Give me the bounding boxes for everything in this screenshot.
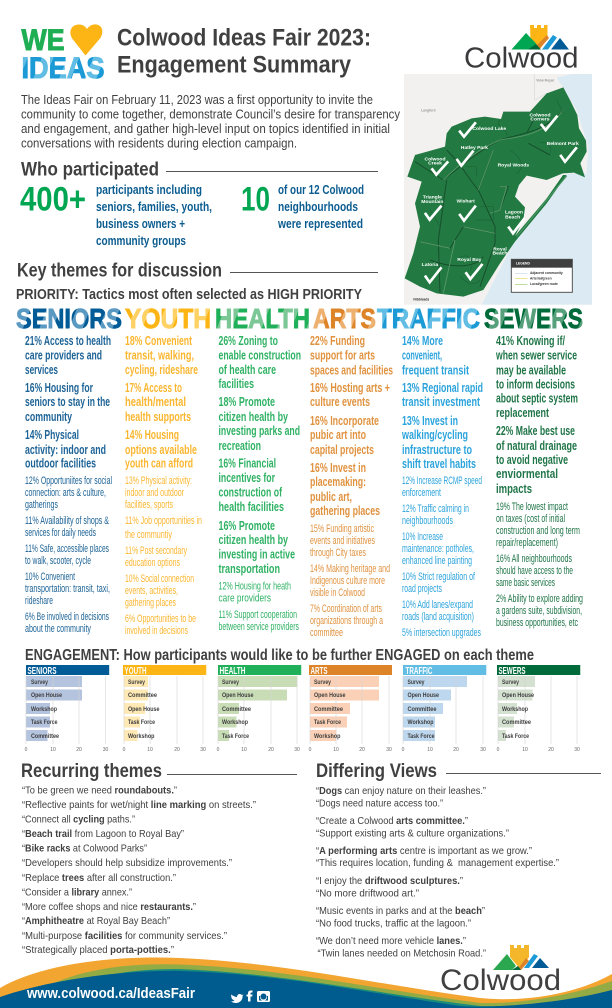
quotes: recurring themes: “More coffee shops and nice restaurants.” (22, 901, 196, 913)
quotes: differing views: “No more driftwood art.” (316, 888, 419, 900)
stat: 10 neighbourhoods (241, 180, 364, 231)
big theme words: HEALTH (215, 303, 310, 334)
heading: Key themes for discussion: Key themes for discussion (17, 260, 222, 282)
map labels: Hatley Park (461, 145, 488, 151)
map labels: Latoria (422, 262, 439, 268)
logo: We Love Ideas: WE (22, 24, 64, 57)
bar chart: traffic: Open House (408, 692, 439, 699)
map of Colwood neighbourhoods (404, 74, 592, 305)
heading: Differing Views: Differing Views (316, 760, 437, 782)
column: traffic: shift travel habits (402, 456, 476, 471)
quotes: differing views: “We don’t need more vehicle lanes.” (316, 935, 466, 947)
bar chart: arts: Task Force (314, 719, 341, 726)
column: arts: capital projects (310, 442, 374, 457)
column: youth: transit, walking, (125, 348, 194, 362)
bar chart: traffic (402, 665, 487, 753)
quotes: recurring themes: “Consider a library annex.” (22, 886, 132, 898)
column: sewers: same basic services (496, 577, 555, 589)
bar chart: traffic: 20 (453, 747, 459, 753)
column: seniors: to walk, scooter, cycle (25, 555, 91, 567)
stat: 400+ participants: seniors, families, youth, (96, 199, 212, 214)
column: sewers: may be available (496, 362, 566, 378)
column: arts: public art, (310, 489, 352, 504)
column: health: incentives for (218, 470, 275, 485)
quotes: recurring themes: “Bike racks at Colwood Parks” (22, 842, 147, 854)
column: traffic: road projects (402, 583, 442, 595)
bar chart: health: 10 (241, 747, 247, 753)
map labels: Mountain (421, 199, 443, 205)
logo: We Love Ideas: IDEAS (22, 52, 104, 85)
column: arts: gathering places (310, 503, 380, 518)
column: health: 11% Support cooperation (218, 609, 297, 621)
column: sewers: to avoid negative (496, 452, 568, 467)
column: health: citizen health by (218, 532, 289, 547)
column: youth: 17% Access to (125, 380, 182, 395)
column: traffic: 10% Strict regulation of (402, 571, 476, 583)
bar chart: traffic: 30 (480, 747, 486, 753)
map labels: Royal (493, 247, 507, 253)
quotes: recurring themes: “To be green we need roundabouts.” (22, 784, 177, 796)
column: health: 16% Financial (218, 456, 276, 470)
column: seniors: 6% Be involved in decisions (25, 611, 109, 623)
map labels: Beach (505, 215, 520, 221)
quotes: recurring themes (22, 784, 256, 956)
bar chart: sewers: Survey (502, 679, 519, 686)
bar chart: arts: Survey (314, 679, 331, 686)
column: sewers: 16% All neighbourhoods (496, 553, 572, 565)
column: traffic: transit investment (402, 394, 481, 409)
intro text: community to come together, demonstrate Council’s desire for transparency (21, 106, 400, 122)
column: seniors: 12% Opportuniites for social (25, 475, 112, 487)
stat: 10 neighbourhoods: neighbourhoods (278, 199, 358, 214)
bar chart: youth: Survey (128, 679, 145, 686)
column: seniors: connection: arts & culture, (25, 487, 106, 499)
column: arts: through City taxes (310, 547, 366, 559)
icons: social media (231, 990, 270, 1003)
column: seniors: community (25, 409, 73, 424)
neighbourhood area (405, 87, 587, 297)
column: youth: 11% Post secondary (125, 545, 187, 557)
quotes: recurring themes: “Amphitheatre at Royal Bay Beach” (22, 915, 170, 927)
column: youth: 13% Physical activity: (125, 475, 192, 487)
column: youth: 18% Convenient (125, 333, 192, 348)
map labels: Colwood (424, 157, 446, 163)
bar chart: traffic: 10 (427, 747, 433, 753)
column: youth: 11% Job opportunities in (125, 515, 202, 527)
column: health: facilities (218, 376, 254, 391)
column: health: 12% Housing for heath (218, 580, 291, 592)
bar chart: sewers: 20 (548, 747, 554, 753)
column: traffic: 12% Increase RCMP speed (402, 475, 482, 487)
bar chart: arts: 0 (309, 747, 312, 753)
heading: Recurring themes: Recurring themes (21, 760, 162, 782)
column: arts: committee (310, 627, 343, 639)
map labels: Corners (530, 117, 550, 123)
column: seniors: gatherings (25, 499, 58, 511)
column: arts: 7% Coordination of arts (310, 603, 382, 615)
column: arts: organizations through a (310, 615, 384, 627)
bar chart: seniors: SENIORS (28, 666, 57, 677)
quotes: differing views: “Twin lanes needed on Metchosin Road.” (318, 948, 486, 960)
column: traffic: roads (land acquisition) (402, 611, 474, 623)
bar chart: traffic: TRAFFIC (406, 666, 432, 677)
map labels: Belmont Park (547, 141, 579, 147)
column: traffic: enhanced line painting (402, 555, 472, 567)
stat: 10 neighbourhoods: of our 12 Colwood (278, 182, 364, 197)
map of Colwood neighbourhoods: Nibbleads (413, 298, 429, 302)
column: traffic: convenient, (402, 348, 442, 362)
bar chart: arts: Workshop (314, 733, 341, 740)
column: seniors: 16% Housing for (25, 380, 93, 395)
map checkmarks (426, 117, 576, 282)
column: sewers: to inform decisions (496, 376, 575, 392)
map labels (421, 113, 579, 268)
intro text: The Ideas Fair on February 11, 2023 was a first opportunity to invite the (21, 92, 373, 107)
column: arts: culture events (310, 394, 370, 409)
column: sewers: 19% The lowest impact (496, 501, 568, 513)
column: health: 26% Zoning to (218, 333, 278, 348)
logo: We Love Ideas (22, 24, 104, 85)
bar chart: sewers: Open House (502, 692, 534, 699)
bar chart: health: HEALTH (220, 666, 246, 677)
bar chart: seniors: Open House (31, 692, 62, 699)
logo: Colwood footer (440, 945, 561, 997)
map legend: Local/green route (530, 282, 558, 286)
column: seniors: about the community (25, 623, 91, 635)
bar chart: arts: Committee (314, 706, 343, 713)
column: health: 16% Promote (218, 518, 275, 533)
bar chart: sewers: Task Force (502, 733, 529, 740)
bar chart: arts: 20 (359, 747, 365, 753)
quotes: differing views (316, 785, 559, 960)
column: traffic: 13% Regional rapid (402, 380, 483, 395)
column: traffic: infrastructure to (402, 442, 472, 457)
quotes: recurring themes: “Developers should help subsidize improvements.” (22, 857, 232, 869)
bar chart: health: 30 (294, 747, 300, 753)
column: health: investing in active (218, 546, 295, 562)
bar chart: sewers: 0 (497, 747, 500, 753)
column: traffic: 10% Add lanes/expand (402, 599, 473, 611)
bar chart: sewers: 10 (522, 747, 528, 753)
bar chart: health: Open House (222, 692, 254, 699)
column: seniors: 11% Safe, accessible places (25, 543, 109, 555)
quotes: differing views: “I enjoy the driftwood sculptures.” (316, 875, 463, 887)
column: traffic: walking/cycling (401, 427, 468, 442)
title: Engagement Summary (117, 52, 352, 78)
column: arts: 16% Incorporate (310, 413, 379, 428)
column: seniors: 21% Access to health (25, 333, 111, 348)
bar chart: sewers: 30 (574, 747, 580, 753)
column: traffic: 10% Increase (402, 531, 443, 543)
bar chart: youth: 30 (200, 747, 206, 753)
column: seniors: 11% Availability of shops & (25, 515, 109, 527)
quotes: recurring themes: “Replace trees after all construction.” (22, 872, 176, 884)
column: health (218, 333, 301, 633)
intro text (21, 92, 400, 150)
bar chart: traffic: Committee (408, 706, 437, 713)
bar chart: seniors: Committee (31, 733, 59, 740)
column: arts: events and initiatives (310, 535, 375, 547)
bar chart: health: Survey (222, 679, 239, 686)
footer wave (0, 957, 612, 1008)
big theme words (16, 303, 583, 334)
bar chart: youth: 0 (123, 747, 126, 753)
map legend (511, 259, 572, 292)
quotes: differing views: “Create a Colwood arts committee.” (316, 815, 468, 827)
column: arts: spaces and facilities (310, 362, 393, 378)
column: youth: the communtiy (125, 529, 172, 541)
column: sewers: of natural drainage (496, 438, 577, 453)
column: health: investing parks and (218, 423, 300, 438)
column: seniors: 10% Convenient (25, 571, 75, 583)
column: youth: indoor and outdoor (125, 487, 184, 499)
map labels: Wishart (457, 199, 475, 205)
bar chart: sewers: SEWERS (498, 666, 526, 677)
bar chart: arts (309, 665, 392, 753)
column: arts: visible in Colwood (310, 587, 365, 599)
column: youth: cycling, rideshare (125, 362, 198, 377)
bar chart: arts: 30 (386, 747, 392, 753)
map labels: Beach (493, 251, 507, 257)
bar chart: youth: Committee (128, 692, 157, 699)
bar chart: health (217, 665, 302, 753)
bar chart: arts: Open House (314, 692, 346, 699)
column: youth: options available (125, 442, 197, 457)
column: traffic (401, 333, 483, 639)
column: traffic: 12% Traffic calming in (402, 503, 469, 515)
column: arts: support for arts (310, 348, 375, 362)
column: health: between service providers (218, 621, 299, 633)
column: sewers: 22% Make best use (496, 423, 575, 438)
bar chart: arts: ARTS (310, 666, 328, 677)
column: youth: education options (125, 557, 180, 569)
column: youth: gathering places (125, 597, 176, 609)
map of Colwood neighbourhoods: View Royal (536, 79, 554, 83)
bar chart: seniors: 20 (76, 747, 82, 753)
quotes: differing views: “Music events in parks and at the beach” (316, 905, 485, 917)
stat: 10 neighbourhoods: were represented (277, 216, 363, 231)
quotes: recurring themes: “Connect all cycling paths.” (22, 814, 135, 826)
column: youth: involved in decisions (125, 625, 188, 637)
map labels: Lagoon (505, 209, 523, 215)
column: sewers: repair/replacement) (496, 537, 558, 549)
big theme words: SENIORS (16, 303, 122, 334)
column: seniors: transportation: transit, taxi, (25, 583, 110, 595)
bar chart: seniors: 10 (50, 747, 56, 753)
quotes: recurring themes: “Strategically placed porta-potties.” (22, 944, 174, 956)
bar chart: seniors: 30 (103, 747, 108, 753)
title: Colwood Ideas Fair 2023: (117, 24, 371, 52)
column: health: citizen health by (218, 409, 289, 424)
big theme words: SEWERS (484, 303, 583, 334)
bar chart: seniors: 0 (25, 747, 28, 753)
footer URL: www.colwood.ca/IdeasFair (26, 985, 195, 1002)
column: youth: events, activities, (125, 585, 178, 597)
subheading: Priority: PRIORITY: Tactics most often selected as HIGH PRIORITY (16, 287, 362, 303)
column: seniors: care providers and (25, 348, 102, 362)
column: seniors: outdoor facilities (25, 456, 96, 470)
column: traffic: 13% Invest in (402, 413, 458, 428)
intro text: conversations with residents during election campaign. (21, 136, 297, 150)
bar chart: health: Workshop (222, 719, 248, 726)
column: traffic: enforcement (402, 487, 441, 499)
bar chart: seniors: Task Force (31, 719, 58, 726)
bar chart: traffic: 0 (402, 747, 405, 753)
bar chart: traffic: Workshop (408, 719, 434, 726)
column: sewers (495, 333, 583, 629)
map labels: Royal Bay (457, 257, 482, 263)
map labels: Royal Woods (498, 163, 529, 169)
column: health: construction of (218, 484, 282, 500)
column: traffic: 14% More (402, 333, 443, 348)
column: arts: 16% Hosting arts + (310, 380, 390, 395)
column: youth: facilities, sports (125, 499, 173, 511)
column: health: recreation (218, 438, 261, 453)
logo: Colwood footer: Colwood (440, 964, 561, 997)
bar chart: arts: 10 (333, 747, 339, 753)
column: sewers: on taxes (cost of initial (496, 513, 565, 525)
column: arts: Indigenous culture more (310, 575, 385, 587)
map labels: Colwood Lake (472, 126, 506, 132)
bar chart: traffic: Survey (408, 679, 425, 686)
bar chart: seniors: Workshop (31, 706, 57, 713)
column: arts (310, 333, 393, 639)
column: arts: 16% Invest in (310, 460, 366, 475)
column: arts: placemaking: (310, 474, 366, 489)
heading: Who participated: Who participated (21, 158, 159, 180)
quotes: recurring themes: “Beach trail from Lagoon to Royal Bay” (22, 828, 184, 840)
column: sewers: impacts (496, 481, 532, 496)
quotes: recurring themes: “Multi-purpose facilities for community services.” (22, 930, 227, 942)
column: arts: 22% Funding (310, 333, 365, 348)
column: sewers: replacement (496, 405, 550, 420)
bar chart: sewers: Workshop (502, 706, 528, 713)
bar chart: seniors (25, 665, 110, 753)
column: seniors: seniors to stay in the (25, 394, 110, 409)
stat: 10 neighbourhoods: 10 (241, 180, 270, 218)
big theme words: TRAFFIC (377, 303, 480, 334)
column: traffic: 5% intersection upgrades (402, 627, 481, 639)
bar chart: youth: YOUTH (124, 666, 146, 677)
logo: Colwood top right: Colwood (464, 42, 578, 74)
column: sewers: 41% Knowing if/ (496, 333, 565, 348)
bar chart: sewers: Committee (502, 719, 531, 726)
bar chart: health: 20 (268, 747, 274, 753)
quotes: differing views: “This requires location, funding & management expertise.” (316, 857, 559, 869)
quotes: differing views: “Dogs need nature access too.” (316, 798, 443, 810)
stat: 400+ participants: participants including (96, 182, 202, 197)
quotes: differing views: “No food trucks, traffic at the lagoon.” (316, 918, 471, 930)
map labels: Colwood (529, 113, 551, 119)
column: youth (125, 333, 202, 637)
quotes: recurring themes: “Reflective paints for wet/night line marking on streets.” (22, 799, 256, 811)
column: youth: youth can afford (125, 456, 193, 470)
column: arts: 14% Making heritage and (310, 563, 390, 575)
bar chart: youth: Workshop (128, 733, 155, 740)
map legend: LEGEND (516, 262, 530, 266)
map of Colwood neighbourhoods: Langford (421, 109, 436, 113)
column: health: transportation (218, 561, 280, 576)
column: health: health facilities (218, 499, 284, 514)
column: health: care providers (218, 592, 271, 604)
bar chart: youth: 10 (147, 747, 153, 753)
column: health: 18% Promote (218, 394, 275, 409)
logo: Colwood top right (464, 25, 578, 74)
bar chart: health: Committee (222, 706, 251, 713)
bar chart: traffic: Task Force (408, 733, 435, 740)
title (117, 24, 371, 78)
big theme words: YOUTH (125, 303, 211, 334)
stat: 400+ participants (20, 180, 212, 248)
column: traffic: frequent transit (402, 362, 470, 378)
column: arts: pubic art into (310, 427, 366, 442)
bar chart: health: Task Force (222, 733, 249, 740)
bar chart: youth: Task Force (128, 719, 155, 726)
map labels: Creek (428, 161, 442, 167)
bar chart: youth: 20 (174, 747, 180, 753)
map legend: Adjacent community (530, 271, 563, 275)
intro text: and engagement, and gather high-level input on topics identified in initial (21, 121, 390, 136)
quotes: differing views: “Support existing arts & culture organizations.” (316, 828, 509, 840)
column: youth: 10% Social connection (125, 573, 194, 585)
column: youth: 14% Housing (125, 427, 179, 442)
column: arts: 15% Funding artistic (310, 523, 374, 535)
map legend: Arterial/green (530, 276, 552, 280)
stat: 400+ participants: business owners + (96, 216, 185, 231)
stat: 400+ participants: 400+ (20, 180, 86, 218)
column: seniors (25, 333, 112, 635)
column: seniors: activity: indoor and (25, 442, 106, 457)
column: youth: health/mental (125, 394, 186, 409)
column: seniors: services for daily needs (25, 527, 96, 539)
map labels: Triangle (423, 194, 442, 200)
column: youth: health supports (125, 409, 191, 424)
column: traffic: maintenance: potholes, (402, 543, 474, 555)
column: sewers: enviormental (496, 466, 558, 481)
bar chart: sewers (497, 665, 581, 753)
column: health: of health care (218, 362, 276, 377)
bar chart: youth: Open House (128, 706, 160, 713)
bar chart: health: 0 (217, 747, 220, 753)
column: traffic: neighbourhoods (402, 515, 453, 527)
big theme words: ARTS (313, 303, 376, 334)
column: seniors: 14% Physical (25, 427, 79, 442)
quotes: differing views: “Dogs can enjoy nature on their leashes.” (316, 785, 486, 797)
bar chart: seniors: Survey (31, 679, 48, 686)
bar chart: youth (123, 665, 207, 753)
column: seniors: services (25, 362, 58, 377)
stat: 400+ participants: community groups (96, 233, 186, 248)
column: health: enable construction (218, 348, 301, 362)
icon: heart (70, 24, 102, 56)
quotes: differing views: “A performing arts centre is important as we grow.” (316, 845, 532, 857)
column: seniors: rideshare (25, 595, 53, 607)
column: youth: 6% Opportunities to be (125, 613, 196, 625)
